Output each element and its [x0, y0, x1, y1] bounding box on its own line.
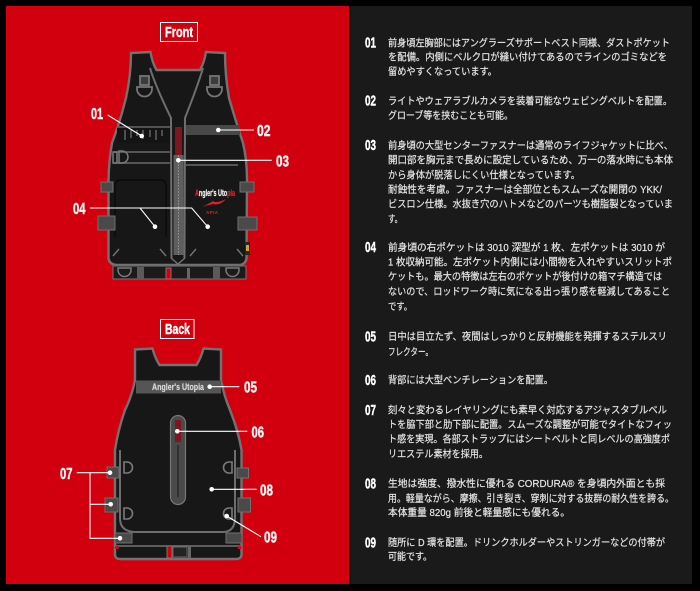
red zip flap: [175, 127, 182, 155]
description list: [365, 34, 674, 563]
D rings: [124, 462, 232, 519]
D ring left chest: [113, 151, 128, 163]
panel: red diagrams background: [6, 6, 349, 584]
item 01: [365, 34, 670, 78]
callout 01: [91, 106, 144, 138]
callout 04: [73, 201, 210, 229]
yellow tag: [245, 242, 250, 255]
item 08: 生地は強度、撥水性に優れる CORDURA® を身頃内外面とも採: [388, 477, 665, 490]
heading: Front: Front: [165, 24, 193, 41]
waist belt and buckle: [115, 546, 242, 558]
item 06: [365, 372, 553, 389]
item 03: 開口部を胸元まで長めに設定しているため、万一の落水時にも本体: [388, 154, 673, 166]
item 09: 可能です。: [388, 550, 432, 563]
item 04: です。: [388, 301, 412, 313]
reflector band: [136, 380, 221, 394]
item 04: [365, 239, 672, 313]
item 07: 07: [365, 402, 376, 419]
waist belt: [113, 266, 246, 280]
item 08: 用。軽量ながら、摩擦、引き裂き、穿刺に対する抜群の耐久性を誇る。: [388, 492, 674, 505]
logo: [195, 188, 236, 215]
item 08: [365, 476, 674, 519]
item 03: 前身頃の大型センターファスナーは通常のライフジャケットに比べ、: [388, 139, 673, 152]
side tabs: [101, 182, 113, 192]
item 07: [365, 402, 672, 460]
vest back illustration: [105, 348, 250, 559]
item 03: す。: [388, 214, 402, 226]
heading: Back: [160, 320, 194, 338]
item 07: ト感を実現。各部ストラップにはシートベルトと同レベルの高強度ポ: [388, 432, 670, 446]
item 06: 背部には大型ベンチレーションを配置。: [388, 374, 553, 386]
panel: dark descriptions background: [351, 6, 692, 584]
item 02: [365, 92, 672, 122]
callout 07: 07: [60, 466, 72, 483]
callout 05: 05: [244, 380, 257, 396]
item 07: トを脇下部と肋下部に配置。スムーズな調整が可能でタイトなフィッ: [388, 418, 672, 431]
item 09: 09: [365, 534, 376, 552]
dust pocket: [117, 127, 170, 143]
item 06: 06: [365, 372, 376, 389]
item 04: ケットも。最大の特徴は左右のポケットが後付けの箱マチ構造では: [388, 270, 662, 283]
item 07: 刻々と変わるレイヤリングにも素早く対応するアジャスタブルベル: [388, 404, 667, 416]
callout 02: 02: [257, 123, 270, 140]
item 05: [365, 328, 667, 358]
callout 07: [60, 466, 122, 541]
heading: Front: [160, 22, 198, 42]
callout 06: [175, 424, 264, 442]
callout 08: 08: [260, 482, 273, 500]
item 02: 02: [365, 92, 376, 110]
item 02: ライトやウェアラブルカメラを装着可能なウェビングベルトを配置。: [388, 94, 672, 108]
logo: APIA: [206, 210, 219, 215]
shoulder D rings: [137, 76, 222, 97]
chest band right: [186, 125, 240, 135]
logo: Angler's Utopia: [195, 188, 236, 198]
left pocket: [115, 180, 166, 237]
front diagram: [73, 22, 289, 280]
item 05: 日中は目立たず、夜間はしっかりと反射機能を発揮するステルスリ: [388, 330, 667, 343]
item 01: 前身頃左胸部にはアングラーズサポートベスト同様、ダストポケット: [388, 36, 670, 50]
item 04: 前身頃の右ポケットは 3010 深型が 1 枚、左ポケットは 3010 が: [388, 241, 665, 254]
callout 09: [224, 514, 277, 546]
item 01: 01: [365, 34, 376, 52]
bottom corners: [113, 249, 243, 264]
item 03: ビスロン仕様。水抜き穴のハトメなどのパーツも樹脂製となっていま: [388, 198, 673, 210]
item 09: [365, 534, 665, 563]
item 09: 随所に D 環を配置。ドリンクホルダーやストリンガーなどの付帯が: [388, 536, 665, 549]
ventilation: [170, 416, 186, 504]
callout 03: [176, 154, 289, 170]
zipper: [174, 155, 184, 255]
item 08: 08: [365, 476, 376, 492]
item 08: 本体重量 820g 前後と軽量感にも優れる。: [388, 506, 570, 519]
callout 03: 03: [276, 154, 289, 170]
back diagram: [60, 320, 277, 559]
neck seam: [157, 69, 200, 71]
callout 04: 04: [73, 201, 86, 218]
callout 05: [207, 380, 257, 396]
item 04: 04: [365, 239, 376, 256]
item 02: グローブ等を挟むことも可能。: [388, 109, 513, 122]
item 01: 留めやすくなっています。: [388, 65, 497, 78]
callout 06: 06: [252, 424, 264, 442]
item 05: フレクター。: [388, 346, 433, 358]
item 05: 05: [365, 328, 376, 346]
item 03: 耐蝕性を考慮。ファスナーは全部位ともスムーズな開閉の YKK/: [388, 183, 662, 196]
item 07: リエステル素材を採用。: [388, 448, 488, 460]
heading: Back: Back: [165, 321, 190, 338]
callout 08: [209, 482, 273, 500]
callout 02: [216, 123, 270, 140]
item 03: [365, 137, 673, 226]
vest front illustration: [98, 52, 257, 280]
item 03: 03: [365, 137, 376, 154]
reflector band: Angler's Utopia: [152, 382, 205, 393]
callout 09: 09: [264, 530, 277, 546]
item 04: 1 枚収納可能。左ポケット内側には小間物を入れやすいスリットポ: [388, 256, 672, 268]
item 01: を配備。内側にベルクロが縫い付けてあるのでラインのゴミなどを: [388, 50, 667, 64]
side straps: [107, 467, 119, 478]
item 04: ないので、ロッドワーク時に気になる出っ張り感を軽減してあること: [388, 285, 670, 298]
item 03: から身体が脱落しにくい仕様となっています。: [388, 168, 580, 182]
callout 01: 01: [91, 106, 103, 123]
